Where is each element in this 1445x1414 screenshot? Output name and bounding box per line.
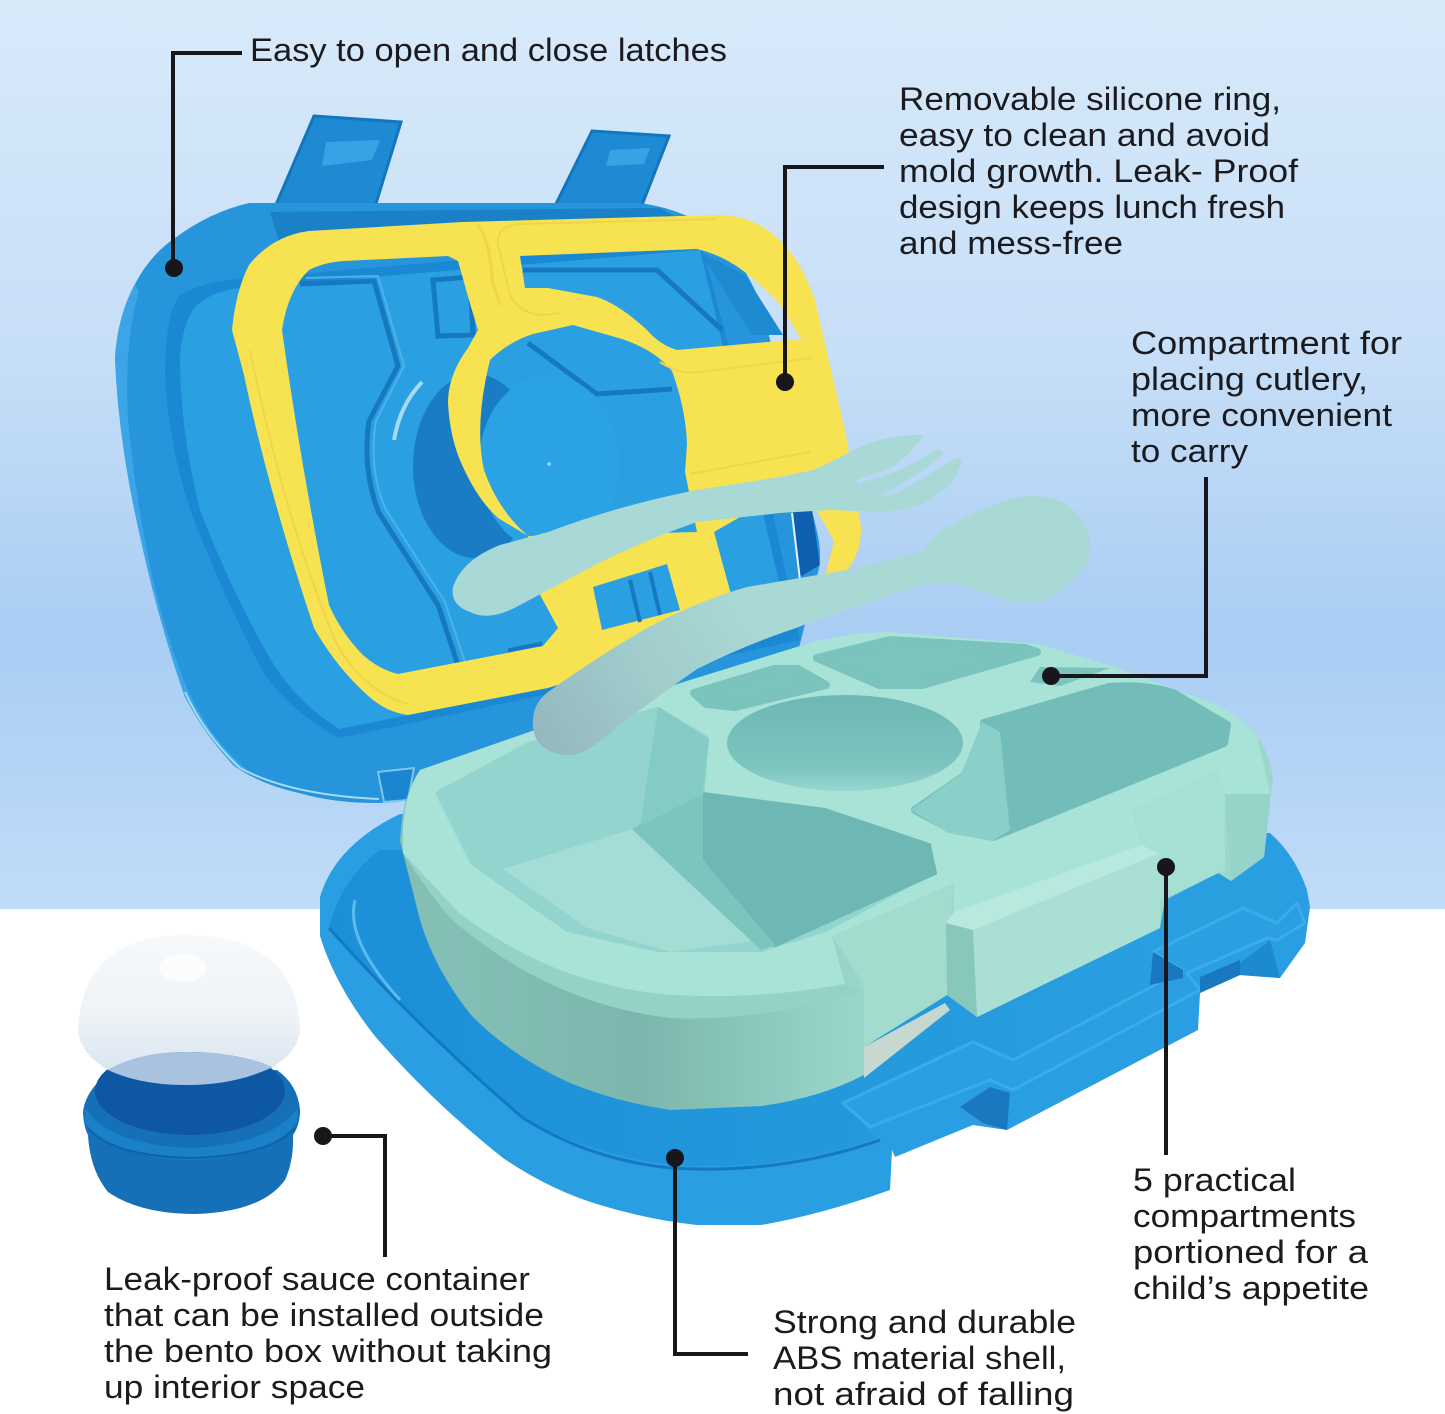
text: cutlery compartment: placing cutlery,: [1131, 361, 1368, 397]
text: sauce container: up interior space: [104, 1369, 365, 1405]
text: sauce container: Leak-proof sauce container: [104, 1261, 530, 1297]
middle wall face: [832, 883, 954, 1047]
text: sauce container: [104, 1261, 552, 1405]
base floor: [329, 850, 1297, 1166]
sauce container: [78, 935, 300, 1214]
leader: cutlery compartment: [1042, 477, 1206, 685]
text: five compartments: compartments: [1133, 1198, 1356, 1234]
compartment: cutlery: [817, 640, 1037, 685]
hinge: [378, 768, 414, 802]
leader lines: [165, 53, 1206, 1354]
text: latches: Easy to open and close latches: [250, 32, 727, 68]
icon: lid latches: [272, 116, 669, 214]
text: five compartments: child’s appetite: [1133, 1270, 1369, 1306]
tray walls: [400, 632, 1273, 1110]
leader: five compartments: [1157, 858, 1175, 1155]
front block: [973, 853, 1160, 1017]
text: ABS shell: Strong and durable: [773, 1304, 1076, 1340]
text: cutlery compartment: Compartment for: [1131, 325, 1402, 361]
cup recess: [413, 374, 537, 558]
text: sauce container: that can be installed outside: [104, 1297, 544, 1333]
leader: ABS shell: [666, 1149, 748, 1354]
base latch groove: [843, 903, 1305, 1130]
lunch box base: [320, 814, 1310, 1225]
leader: silicone ring: [776, 167, 884, 391]
container base: [83, 1070, 300, 1214]
silicone ring: [232, 215, 861, 715]
text: ABS shell: not afraid of falling: [773, 1376, 1074, 1412]
container lid: [78, 935, 300, 1070]
text: silicone ring: and mess-free: [899, 225, 1123, 261]
text: five compartments: portioned for a: [1133, 1234, 1368, 1270]
compartment: large left: [440, 707, 935, 952]
leader: sauce container: [314, 1127, 385, 1257]
text: silicone ring: [899, 81, 1298, 261]
ridges through small opening: [630, 572, 660, 622]
lid shell: [115, 203, 820, 803]
lid ridges: [300, 270, 722, 684]
text: ABS shell: ABS material shell,: [773, 1340, 1066, 1376]
lunch box lid: [115, 116, 820, 803]
text: five compartments: 5 practical: [1133, 1162, 1296, 1198]
text: silicone ring: easy to clean and avoid: [899, 117, 1270, 153]
leader: latches: [165, 53, 242, 277]
text: cutlery compartment: [1131, 325, 1402, 469]
front lip: [403, 853, 864, 1018]
text: silicone ring: design keeps lunch fresh: [899, 189, 1285, 225]
lid inner panel: [165, 240, 800, 738]
tray top rim: [403, 632, 1270, 996]
ring highlight bevels: [250, 219, 812, 704]
text: silicone ring: mold growth. Leak- Proof: [899, 153, 1298, 189]
mint compartment tray: [400, 632, 1273, 1110]
compartment: round: [727, 695, 963, 791]
text: cutlery compartment: to carry: [1131, 433, 1248, 469]
text: sauce container: the bento box without taking: [104, 1333, 552, 1369]
text: ABS shell: [773, 1304, 1076, 1412]
compartment: small: [694, 669, 826, 707]
text: silicone ring: Removable silicone ring,: [899, 81, 1281, 117]
text: cutlery compartment: more convenient: [1131, 397, 1392, 433]
compartment: right: [911, 686, 1227, 841]
top back strip: [270, 208, 700, 245]
spoon: [533, 496, 1090, 755]
text: five compartments: [1133, 1162, 1369, 1306]
fork: [453, 435, 962, 616]
